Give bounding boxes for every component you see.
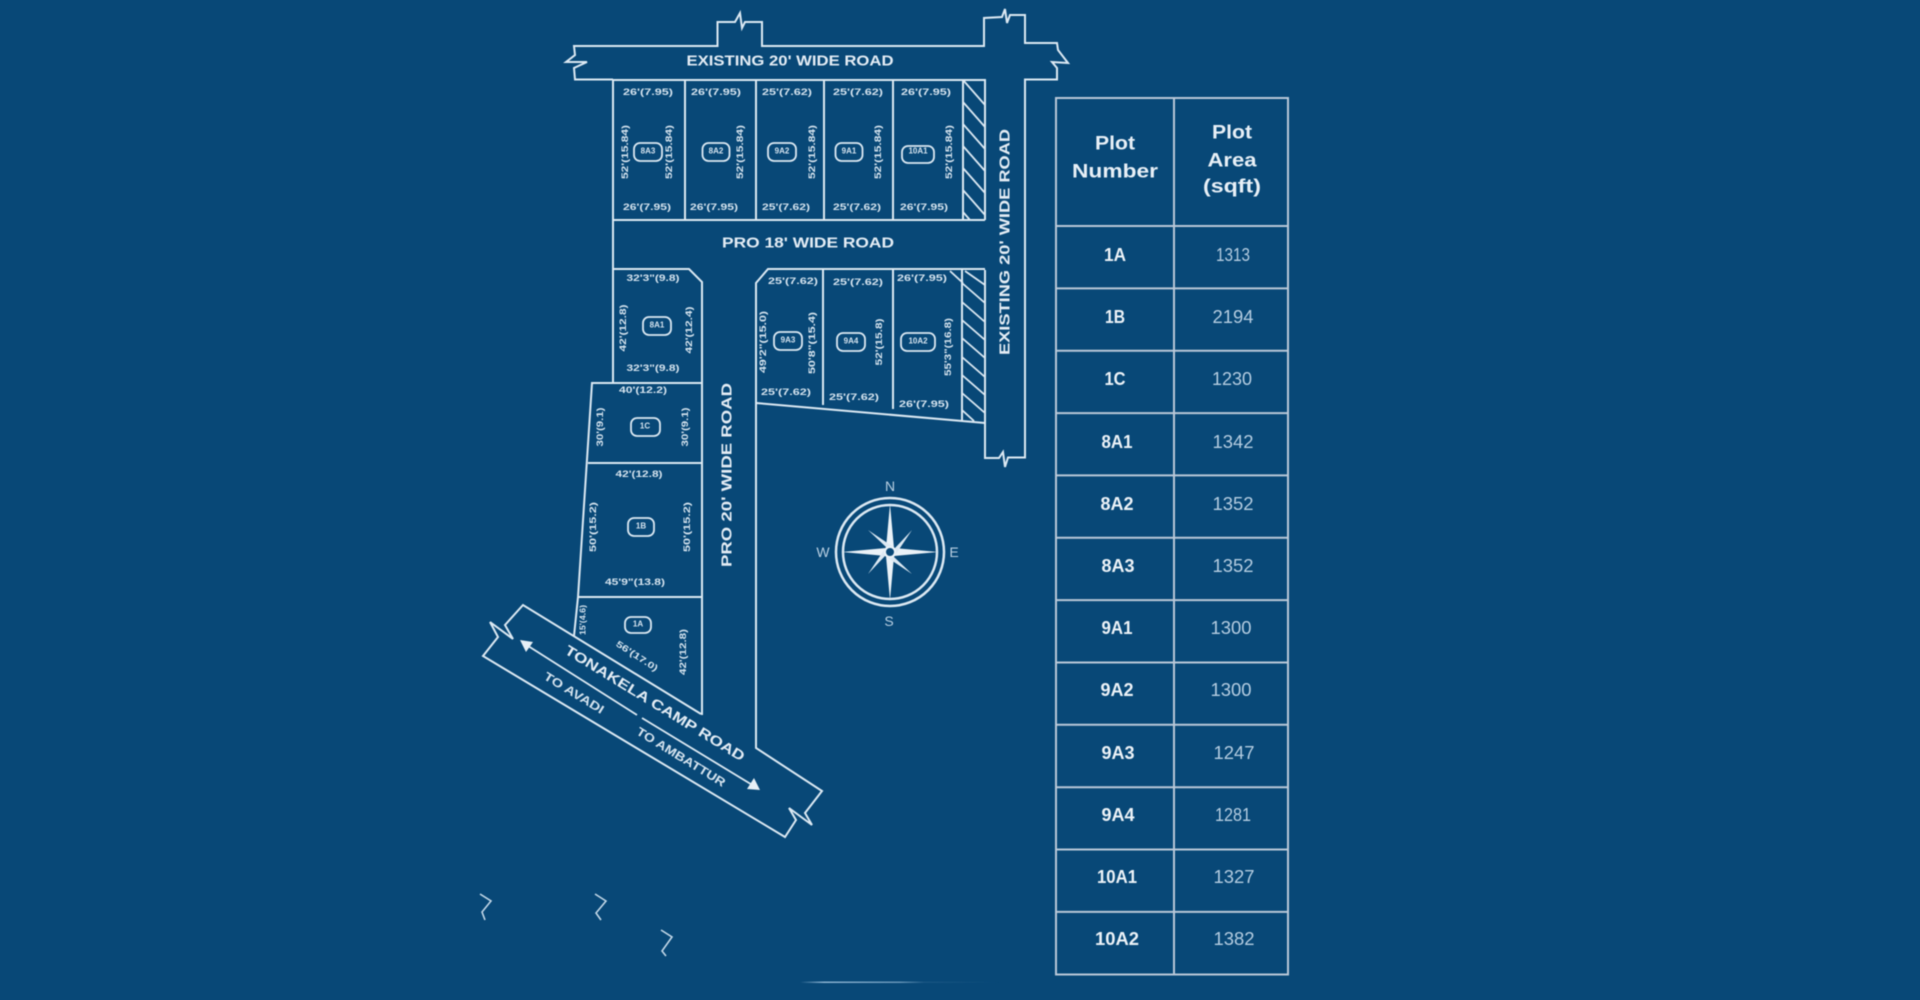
lower plot tags xyxy=(774,332,935,351)
site plan xyxy=(483,9,1068,837)
lower plot dimensions: 50'8"(15.4) xyxy=(807,312,817,374)
arrow toward Ambattur xyxy=(642,718,760,790)
plot number column: 1C xyxy=(1104,369,1126,389)
top plot row xyxy=(620,80,985,220)
lower plot dimensions: 52'(15.8) xyxy=(874,318,884,366)
plot area column: 1382 xyxy=(1214,929,1254,949)
hatched strip top xyxy=(963,80,985,220)
top row dimensions: 52'(15.84) xyxy=(620,125,630,179)
plot 1A: 56'(17.0) xyxy=(614,639,660,673)
plot number column: 1B xyxy=(1105,307,1125,327)
top row dimensions: 26'(7.95) xyxy=(691,87,741,97)
plot 1B: 42'(12.8) xyxy=(616,469,662,479)
plot number column: 9A1 xyxy=(1102,618,1132,638)
top row dimensions xyxy=(620,87,954,212)
direction: to Avadi: TO AVADI xyxy=(541,669,607,717)
faint line at bottom xyxy=(800,982,1000,983)
top row plot tags: 9A1 xyxy=(842,146,857,156)
plot area column: 1313 xyxy=(1216,245,1250,265)
plot 1C: 30'(9.1) xyxy=(680,407,690,446)
plot number column: 10A2 xyxy=(1095,929,1139,949)
top row plot tags: 9A2 xyxy=(775,146,790,156)
plot 1B: 45'9"(13.8) xyxy=(605,577,665,587)
plot area column xyxy=(1210,245,1254,949)
plot 1C: 40'(12.2) xyxy=(619,385,667,395)
plot area column: 1300 xyxy=(1210,680,1252,700)
top row dimensions: 26'(7.95) xyxy=(901,87,951,97)
lower plot tags: 9A4 xyxy=(844,336,859,346)
top row dimensions: 25'(7.62) xyxy=(833,87,883,97)
lower right plots xyxy=(483,269,985,837)
lower plot dimensions: 25'(7.62) xyxy=(761,387,811,397)
plot number column xyxy=(1095,245,1139,949)
plot area column: 1342 xyxy=(1212,432,1254,452)
plot 1A xyxy=(578,605,688,675)
top row dimensions: 25'(7.62) xyxy=(833,202,881,212)
lower plot dimensions: 26'(7.95) xyxy=(897,273,947,283)
lower plot dimensions: 25'(7.62) xyxy=(829,392,879,402)
plot 8A1: 32'3"(9.8) xyxy=(626,273,680,283)
compass rose: S xyxy=(884,613,894,629)
plot 1C: 1C xyxy=(640,422,650,430)
table header: Plot xyxy=(1095,134,1136,154)
plot number column: 8A3 xyxy=(1102,556,1134,576)
road label: existing 20 ft side road: EXISTING 20' WIDE ROAD xyxy=(996,129,1014,355)
road name: TONAKELA CAMP ROAD xyxy=(562,642,748,764)
table header: (sqft) xyxy=(1203,176,1261,198)
road label: existing 20 ft top road: EXISTING 20' WIDE ROAD xyxy=(686,52,894,70)
compass rose: E xyxy=(949,544,959,560)
plot 1A: 42'(12.8) xyxy=(678,629,688,675)
plot area column: 1247 xyxy=(1214,743,1254,763)
arrow toward Avadi xyxy=(520,640,637,715)
lower plot dimensions: 25'(7.62) xyxy=(833,277,883,287)
plot area column: 1352 xyxy=(1212,494,1254,514)
plot 8A1: 8A1 xyxy=(650,320,665,330)
plots 8A1 1C 1B 1A outline xyxy=(574,269,702,715)
plot 1B: 1B xyxy=(636,522,646,530)
plot 1B: 50'(15.2) xyxy=(682,502,692,552)
direction: to Ambattur: TO AMBATTUR xyxy=(634,724,728,790)
hatched strip bottom xyxy=(950,271,985,421)
plot 1B xyxy=(588,469,692,587)
table header xyxy=(1072,122,1261,198)
top row dimensions: 26'(7.95) xyxy=(900,202,948,212)
road label: proposed 18 ft road: PRO 18' WIDE ROAD xyxy=(722,234,894,252)
plot area column: 2194 xyxy=(1212,307,1254,327)
plot 8A1: 42'(12.4) xyxy=(684,306,694,354)
top row dimensions: 26'(7.95) xyxy=(690,202,738,212)
plot 1A: 15'(4.6) xyxy=(578,605,588,635)
table header: Number xyxy=(1072,162,1159,182)
top row plot tags xyxy=(634,143,934,163)
plot 8A1: 42'(12.8) xyxy=(618,304,628,352)
plot number column: 9A2 xyxy=(1100,680,1134,700)
top row dimensions: 52'(15.84) xyxy=(735,125,745,179)
top row plot tags: 8A2 xyxy=(709,146,724,156)
top row dimensions: 25'(7.62) xyxy=(762,202,810,212)
lower plot dimensions: 26'(7.95) xyxy=(899,399,949,409)
top row dimensions: 26'(7.95) xyxy=(623,87,673,97)
lower plot tags: 9A3 xyxy=(781,336,796,344)
lower plot dimensions: 49'2"(15.0) xyxy=(758,311,768,373)
plot area table xyxy=(1056,98,1288,974)
top row dimensions: 25'(7.62) xyxy=(762,87,812,97)
plot 1C: 30'(9.1) xyxy=(595,407,605,446)
top row plot tags: 8A3 xyxy=(641,146,656,156)
plot number column: 8A1 xyxy=(1102,432,1132,452)
table grid xyxy=(1056,98,1288,974)
top row dimensions: 52'(15.84) xyxy=(664,125,674,179)
plot 8A1 xyxy=(618,273,694,373)
plot number column: 9A4 xyxy=(1102,805,1134,825)
top row dimensions: 52'(15.84) xyxy=(807,125,817,179)
lower plot tags: 10A2 xyxy=(908,336,928,346)
top row plot tags: 10A1 xyxy=(908,146,928,156)
plot 1B: 50'(15.2) xyxy=(588,502,598,552)
plot number column: 1A xyxy=(1104,245,1126,265)
plot number column: 8A2 xyxy=(1100,494,1134,514)
compass rose: W xyxy=(816,544,830,560)
compass rose: N xyxy=(885,478,895,494)
top row dimensions: 26'(7.95) xyxy=(623,202,671,212)
plot area column: 1230 xyxy=(1212,369,1252,389)
plot number column: 10A1 xyxy=(1097,867,1137,887)
road label: proposed 20 ft road: PRO 20' WIDE ROAD xyxy=(718,383,736,567)
plot 1A: 1A xyxy=(633,620,643,628)
table header: Area xyxy=(1208,150,1257,172)
plot 1C xyxy=(595,385,690,446)
plot area column: 1281 xyxy=(1215,805,1251,825)
table header: Plot xyxy=(1212,122,1253,144)
top row dimensions: 52'(15.84) xyxy=(873,125,883,179)
plot number column: 9A3 xyxy=(1102,743,1134,763)
stray squiggles xyxy=(480,894,672,956)
lower plot dimensions: 25'(7.62) xyxy=(768,276,818,286)
lower plot dimensions xyxy=(758,273,953,409)
compass rose xyxy=(816,478,959,629)
plot area column: 1300 xyxy=(1210,618,1252,638)
plot area column: 1352 xyxy=(1212,556,1254,576)
plot 8A1: 32'3"(9.8) xyxy=(626,363,680,373)
top row dimensions: 52'(15.84) xyxy=(944,125,954,179)
lower plot dimensions: 55'3"(16.8) xyxy=(943,318,953,376)
Tonakela camp road labels and arrows xyxy=(520,640,760,790)
plot area column: 1327 xyxy=(1214,867,1254,887)
road outlines xyxy=(566,9,1068,467)
